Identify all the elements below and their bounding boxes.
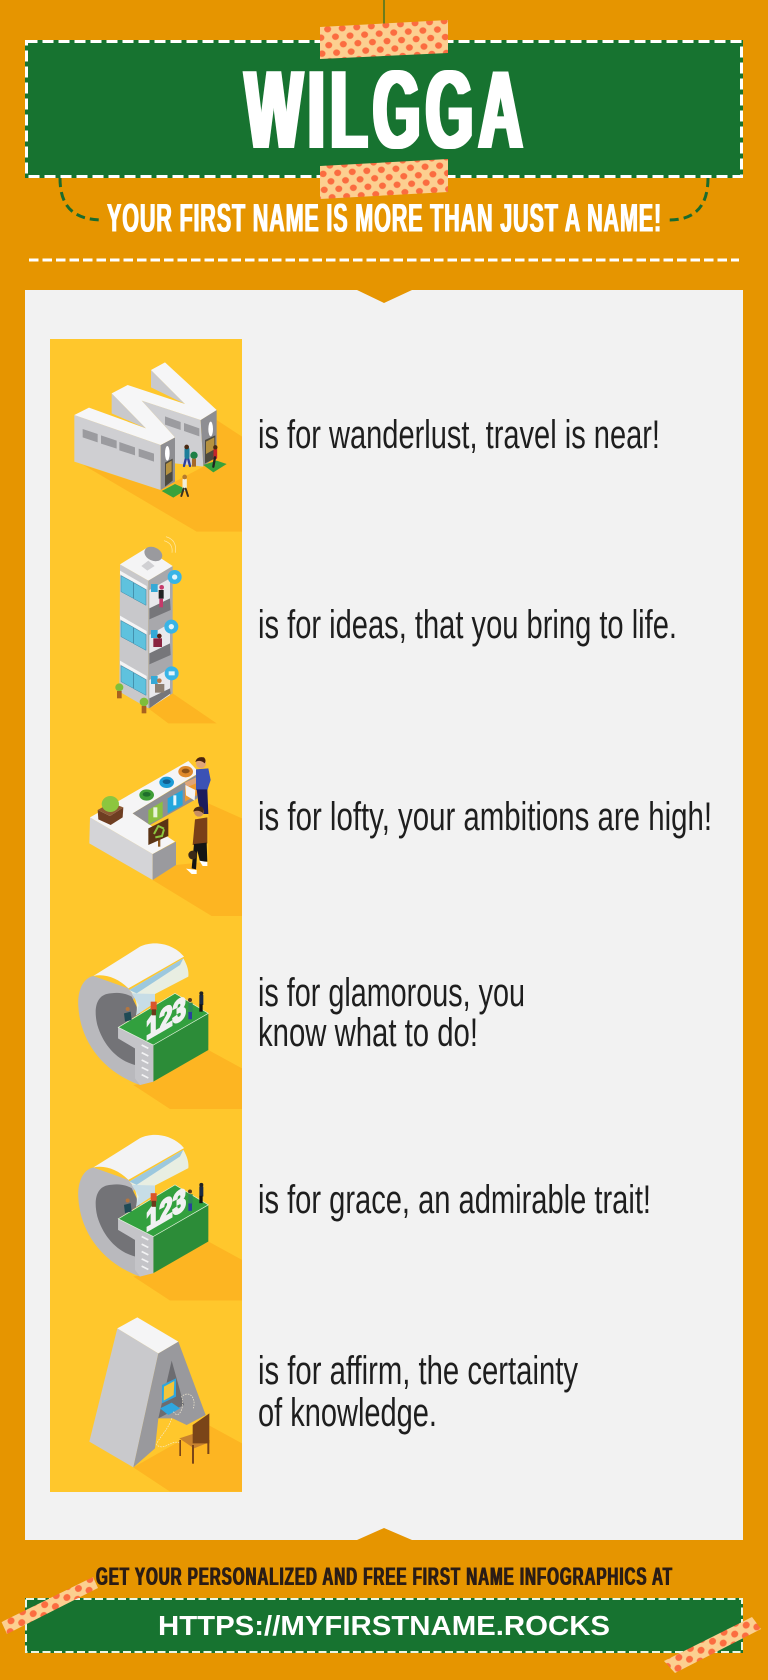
right leg: [133, 1342, 206, 1467]
tape: left: [2, 1577, 98, 1634]
tape: right: [664, 1617, 761, 1673]
right face: [148, 566, 173, 708]
row text: G: know what to do!: [258, 1011, 478, 1055]
people: [181, 449, 215, 496]
inner dark: [96, 993, 140, 1065]
top surface: [90, 761, 199, 854]
icon: letter G with green block: [78, 943, 242, 1109]
front wall: [74, 415, 161, 490]
rear walls: [112, 393, 146, 428]
green block faces: [153, 1205, 208, 1273]
shadow: [133, 1241, 242, 1300]
person: brown jacket: [186, 807, 207, 874]
windows: [83, 416, 199, 462]
top band: [93, 943, 184, 988]
bin lids: [139, 789, 154, 801]
figures: [124, 1183, 203, 1213]
top tape: [320, 20, 448, 59]
subtitle with side brackets: [60, 178, 708, 240]
green block faces: [153, 1013, 208, 1082]
top face: [117, 1317, 178, 1353]
panel: white content sheet: [25, 290, 743, 1540]
row text: A: of knowledge.: [258, 1391, 437, 1435]
satellite dish: [142, 544, 165, 564]
planter: [98, 807, 123, 825]
numerals: 123: [146, 1182, 186, 1239]
left bracket: [60, 178, 103, 220]
panel: yellow illustration column: [50, 339, 242, 1492]
green title panel: [25, 40, 743, 178]
row text: G: [258, 971, 525, 1055]
icon: letter I tower: [115, 537, 217, 723]
ladder marks: [142, 1045, 148, 1078]
shadow: [133, 1050, 242, 1109]
url: HTTPS://MYFIRSTNAME.ROCKS: [158, 1610, 610, 1641]
screen: [162, 1378, 176, 1403]
awnings: [120, 571, 147, 679]
left face: [89, 1328, 158, 1467]
potted plants: [115, 683, 123, 691]
icon: letter A with chair: [89, 1317, 242, 1492]
ladder marks: [142, 1236, 148, 1269]
ring face: [78, 976, 153, 1085]
numerals: 123: [146, 991, 186, 1047]
bin wall: [133, 774, 197, 825]
grass: [162, 484, 187, 498]
balconies: [149, 578, 170, 708]
shadow: [148, 693, 217, 723]
right bracket: [669, 178, 708, 220]
person: blue shirt: [185, 757, 211, 814]
roof: [120, 548, 173, 581]
roof: [74, 362, 217, 445]
laptop: [160, 1403, 180, 1415]
left face: [119, 564, 148, 708]
hanging string: [383, 0, 385, 24]
shadow: [83, 420, 242, 532]
title: WILGGA: [245, 48, 528, 172]
icon: letter W building: [74, 362, 242, 532]
shadow: [133, 1425, 242, 1492]
row text: G: is for glamorous, you: [258, 971, 525, 1015]
inner dark: [96, 1184, 140, 1256]
plant: [190, 452, 198, 459]
dashed cable: [157, 1394, 194, 1447]
occupants: [151, 584, 164, 693]
glass curl: [129, 958, 188, 1015]
shadow: [153, 803, 242, 916]
glass curl: [129, 1150, 188, 1207]
inner opening: [158, 1361, 184, 1418]
header banner: [25, 0, 743, 199]
speech bubbles: [164, 570, 182, 680]
ring face: [78, 1167, 153, 1276]
footer URL banner: [2, 1577, 761, 1673]
chair: [179, 1413, 209, 1464]
bottom tape: [320, 159, 448, 199]
icon: second letter G with green block: [78, 1135, 242, 1300]
top band: [93, 1135, 184, 1180]
doors and signs: [165, 459, 173, 487]
recycling sign: [158, 830, 160, 847]
row text: A: is for affirm, the certainty: [258, 1349, 578, 1393]
icon: recycling counter: [89, 757, 242, 916]
figures: [124, 991, 203, 1022]
windows: [121, 576, 146, 695]
front faces: [89, 817, 153, 880]
row text: A: [258, 1349, 578, 1435]
green panel: [25, 1598, 743, 1653]
